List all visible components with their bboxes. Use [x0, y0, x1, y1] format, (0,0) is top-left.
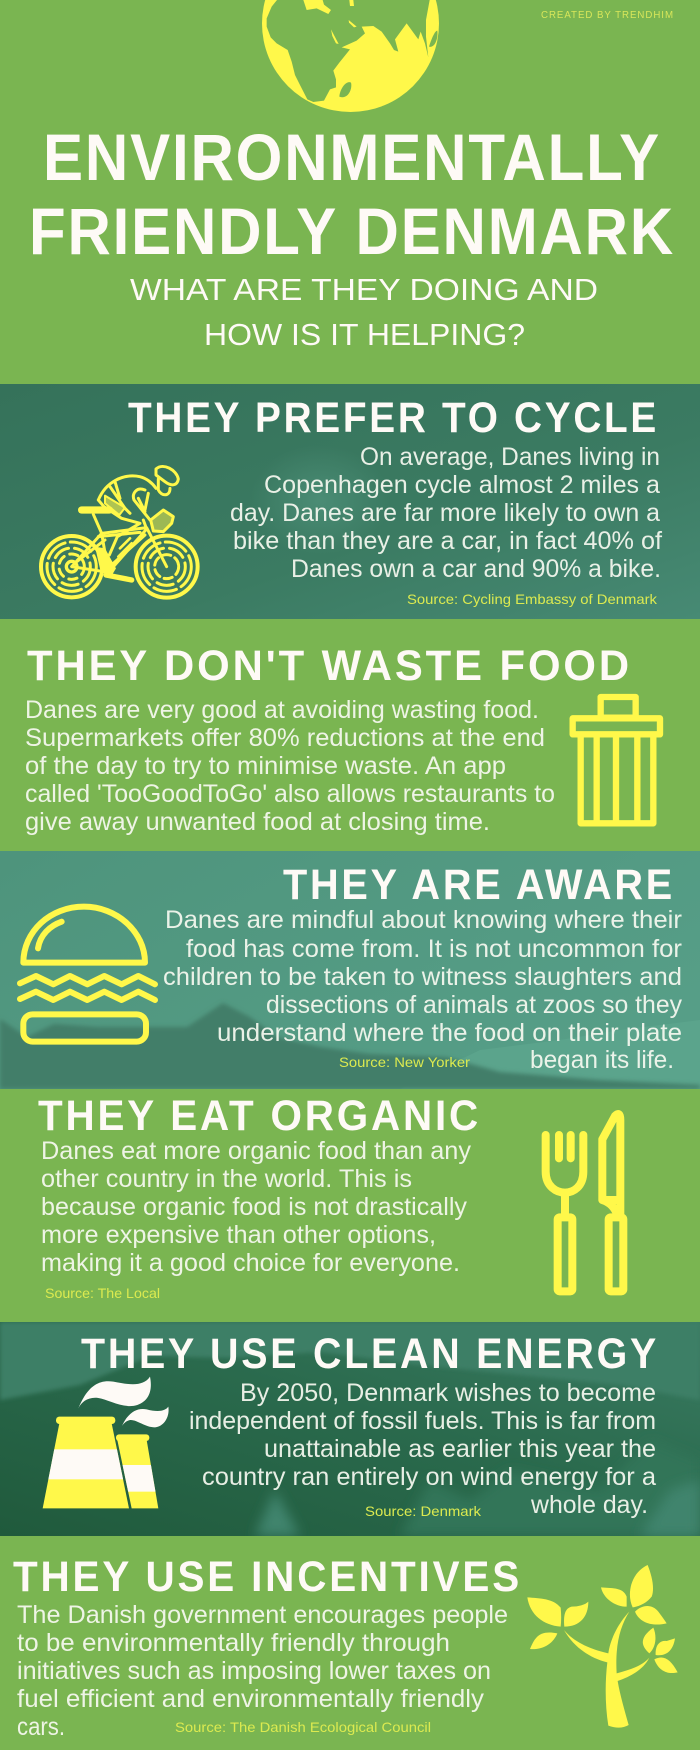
icon: globe	[262, 0, 439, 112]
heading: incentives: THEY USE INCENTIVES	[13, 1553, 522, 1601]
header	[29, 0, 675, 352]
heading: prefer to cycle: THEY PREFER TO CYCLE	[128, 394, 659, 442]
subtitle	[130, 272, 598, 352]
icon: tree	[527, 1565, 678, 1728]
body text: food waste: called 'TooGoodToGo' also allows restaurants to	[25, 780, 555, 808]
icon: burger	[20, 907, 155, 1042]
body text: awareness: children to be taken to witness slaughters and	[163, 963, 682, 991]
icon: power plant	[30, 1377, 169, 1508]
panel: clean energy	[0, 1322, 700, 1536]
body text: organic: more expensive than other options,	[41, 1221, 436, 1249]
subtitle: HOW IS IT HELPING?	[204, 317, 525, 352]
body text: food waste: Danes are very good at avoiding wasting food.	[25, 696, 539, 724]
body text: awareness: began its life.	[530, 1046, 674, 1074]
body text: cycling: Danes own a car and 90% a bike.	[291, 555, 661, 583]
body text: organic: other country in the world. This is	[41, 1165, 412, 1193]
body text: incentives: to be environmentally friendly through	[17, 1629, 450, 1657]
icon: cyclist	[41, 466, 198, 598]
subtitle: WHAT ARE THEY DOING AND	[130, 272, 598, 307]
body text: cycling: day. Danes are far more likely to own a	[230, 499, 660, 527]
title	[29, 120, 675, 268]
body text: incentives: initiatives such as imposing lower taxes on	[17, 1657, 491, 1685]
panel: awareness	[0, 851, 700, 1089]
body text: organic: making it a good choice for everyone.	[41, 1249, 460, 1277]
body text: awareness: dissections of animals at zoos so they	[266, 991, 682, 1019]
body text: awareness	[163, 906, 682, 1074]
body text: clean energy: unattainable as earlier this year the	[264, 1435, 656, 1463]
body text: cycling: On average, Danes living in	[360, 443, 660, 471]
body text: clean energy: independent of fossil fuels. This is far from	[189, 1407, 656, 1435]
icon: fork and knife	[546, 1114, 623, 1291]
body text: organic	[41, 1137, 471, 1277]
body text: cycling	[230, 443, 662, 583]
source: organic: Source: The Local	[45, 1285, 160, 1301]
body text: clean energy: By 2050, Denmark wishes to become	[240, 1379, 656, 1407]
panel: food waste	[25, 642, 660, 836]
credit line: CREATED BY TRENDHIM	[541, 10, 674, 21]
panel: cycling	[0, 384, 700, 619]
body text: clean energy: country ran entirely on wind energy for a	[202, 1463, 656, 1491]
heading: clean energy: THEY USE CLEAN ENERGY	[81, 1330, 659, 1378]
heading: are aware: THEY ARE AWARE	[283, 861, 675, 909]
body text: food waste: Supermarkets offer 80% reductions at the end	[25, 724, 545, 752]
body text: food waste: of the day to try to minimise waste. An app	[25, 752, 506, 780]
body text: awareness: Danes are mindful about knowing where their	[165, 906, 682, 934]
body text: clean energy: whole day.	[530, 1491, 648, 1519]
body text: awareness: understand where the food on their plate	[217, 1019, 682, 1047]
body text: cycling: bike than they are a car, in fact 40% of	[233, 527, 662, 555]
body text: food waste	[25, 696, 555, 836]
body text: cycling: Copenhagen cycle almost 2 miles a	[264, 471, 660, 499]
body text: organic: Danes eat more organic food than any	[41, 1137, 471, 1165]
body text: organic: because organic food is not drastically	[41, 1193, 467, 1221]
heading: don't waste food: THEY DON'T WASTE FOOD	[27, 642, 632, 690]
body text: food waste: give away unwanted food at closing time.	[25, 808, 490, 836]
body text: incentives: The Danish government encourages people	[17, 1601, 508, 1629]
body text: incentives: cars.	[17, 1713, 65, 1741]
source: awareness: Source: New Yorker	[339, 1054, 470, 1070]
source: clean energy: Source: Denmark	[365, 1503, 482, 1519]
body text: incentives	[17, 1601, 508, 1741]
body text: clean energy	[189, 1379, 656, 1519]
panel: incentives	[13, 1553, 678, 1741]
heading: eat organic: THEY EAT ORGANIC	[38, 1092, 481, 1140]
icon: trash can	[573, 697, 660, 823]
body text: incentives: fuel efficient and environmentally friendly	[17, 1685, 485, 1713]
source: incentives: Source: The Danish Ecological Council	[175, 1719, 431, 1735]
panel: organic	[38, 1092, 623, 1301]
source: cycling: Source: Cycling Embassy of Denmark	[407, 591, 658, 607]
body text: awareness: food has come from. It is not uncommon for	[186, 935, 682, 963]
